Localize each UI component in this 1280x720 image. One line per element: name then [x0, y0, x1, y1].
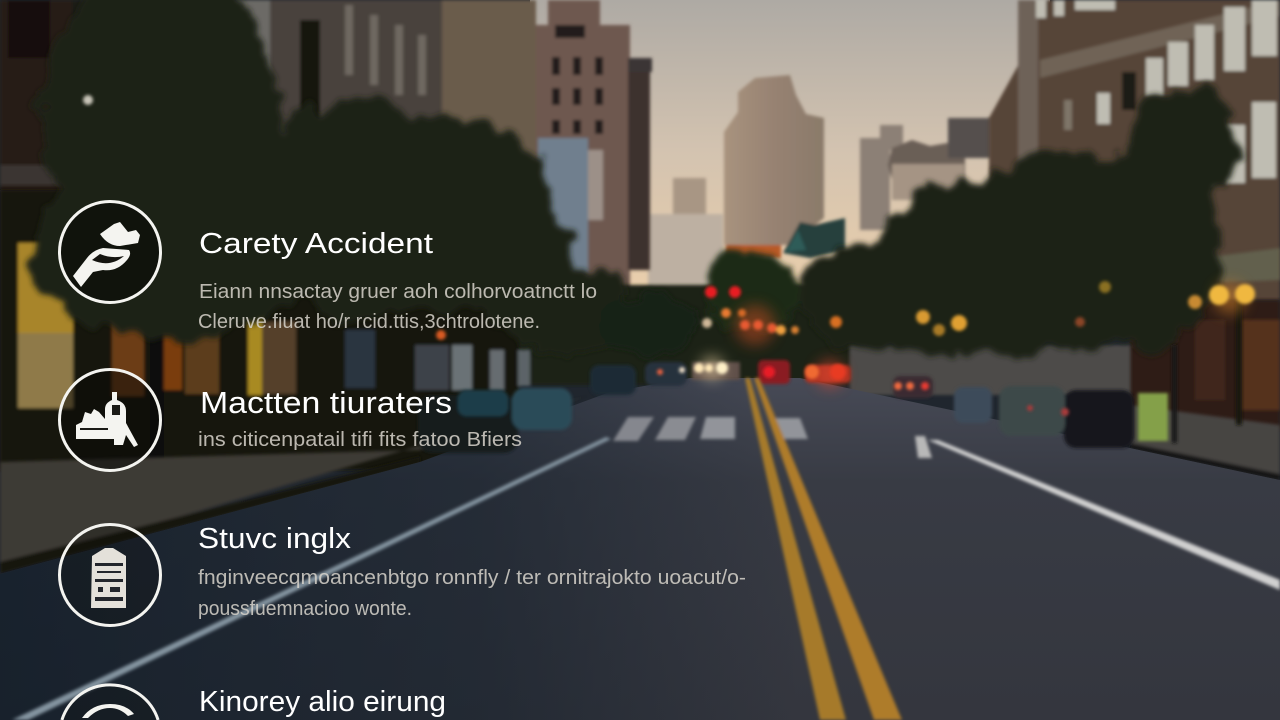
heading: Kinorey alio eirung — [199, 686, 446, 718]
description: fnginveecqmoancenbtgo ronnfly / ter ornitrajokto uoacut/o- — [198, 567, 746, 589]
description: Cleruve.fiuat ho/r rcid.ttis,3chtrolotene. — [198, 311, 540, 333]
road shading — [0, 378, 900, 720]
list row 4 — [62, 685, 446, 720]
description — [198, 281, 597, 333]
road markings — [12, 378, 1280, 720]
heading: Carety Accident — [199, 228, 433, 260]
description: poussfuemnacioo wonte. — [198, 598, 412, 620]
heading: Stuvc inglx — [198, 523, 352, 555]
storefronts left and right — [0, 190, 1280, 495]
parked cars and traffic — [418, 300, 1242, 453]
sky — [530, 0, 1050, 300]
list row 2 — [60, 370, 522, 470]
description: ins citicenpatail tifi fits fatoo Bfiers — [198, 429, 522, 451]
trees — [30, 0, 1240, 357]
street lights and signal glows — [83, 95, 1255, 416]
right white line — [928, 440, 1280, 590]
heading: Mactten tiuraters — [200, 385, 452, 420]
sidewalks — [0, 395, 1280, 574]
description: Eiann nnsactay gruer aoh colhorvoatnctt lo — [199, 281, 597, 303]
icon: machinery — [60, 370, 160, 470]
description — [198, 567, 746, 620]
yellow double line — [745, 378, 846, 720]
icon: partially cropped — [62, 685, 158, 720]
distant skyline towers — [648, 75, 992, 288]
right buildings — [989, 0, 1280, 300]
list row 1 — [60, 202, 597, 333]
icon: clipboard tag — [60, 524, 160, 626]
left white line — [12, 437, 611, 720]
crosswalk — [613, 417, 654, 441]
icon: hand holding — [60, 202, 160, 302]
road surface — [0, 378, 1280, 720]
list row 3 — [60, 523, 746, 626]
left buildings — [0, 0, 652, 470]
